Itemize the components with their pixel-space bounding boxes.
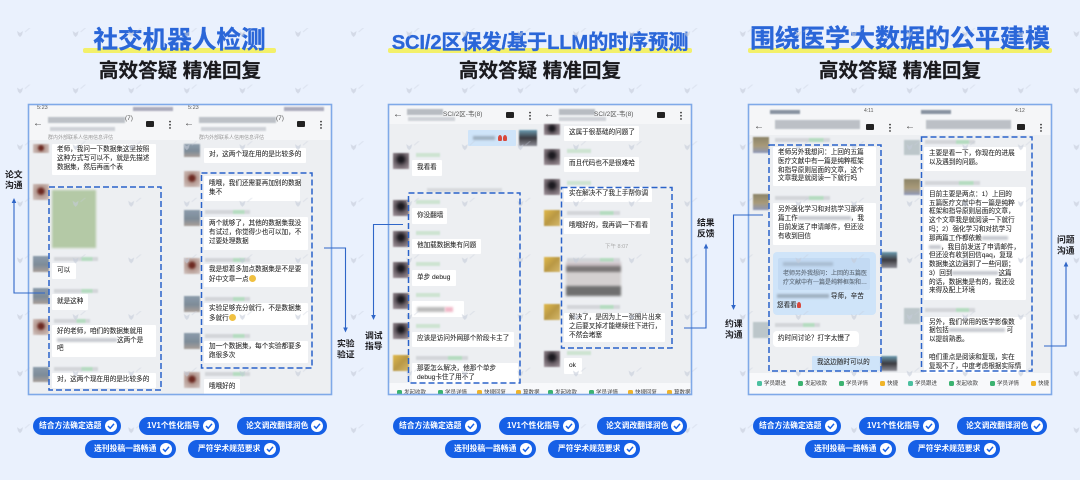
- arrow: question communication: [1044, 234, 1075, 346]
- panel: chat screenshots 3: 主要是看一下，你现在的进展: [929, 150, 1015, 157]
- feature pills: panel 1: 选刊投稿一路畅通: [94, 444, 156, 453]
- subtitle: panel 1: 高效答疑 精准回复: [99, 60, 261, 82]
- panel: chat screenshots 1: 哦哦，我们还需要再加别的数据: [209, 180, 301, 187]
- panel: chat screenshots 1: 群内外部联系人信用信息评估: [199, 135, 264, 141]
- panel: chat screenshots 3: 老师另外我想问：上回的五篇: [778, 149, 864, 156]
- panel: chat screenshots 3: 的话，数据集是有的，我还没: [929, 279, 1015, 286]
- panel: chat screenshots 2: 我看看: [417, 164, 437, 171]
- panel: chat screenshots 3: 医疗文献中有一篇是纯粹框架: [778, 158, 864, 165]
- panel: chat screenshots 1: (7): [125, 115, 133, 122]
- bottom action bar: 学员详情: [997, 381, 1019, 387]
- panel: chat screenshots 3: 和指导原则层面的文章，这个: [778, 166, 864, 174]
- arrow: scheduling communication: 约课: [725, 318, 743, 328]
- panel: chat screenshots 1: 5:23: [37, 105, 48, 111]
- panel: chat screenshots 2: ←: [544, 109, 554, 120]
- panel: chat screenshots 3: 目前主要是两点：1）上回的: [929, 191, 1012, 198]
- panel: chat screenshots 1: 两个就够了，其他的数据集我没: [209, 220, 301, 227]
- feature pills: panel 1: 严符学术规范要求: [198, 444, 260, 453]
- subtitle: panel 2: 高效答疑 精准回复: [459, 60, 621, 82]
- panel: chat screenshots 3: 以及遇到的问题。: [929, 159, 982, 166]
- panel: chat screenshots 2: 单步 debug: [417, 274, 450, 281]
- panel: chat screenshots 2: 那要怎么解决，他那个单步: [417, 365, 496, 372]
- panel: chat screenshots 3: 复现不了，中度考虑根据实际情: [929, 363, 1021, 370]
- panel: chat screenshots 1: 跑很多次: [209, 352, 235, 359]
- panel: chat screenshots 1: (7): [276, 115, 284, 122]
- panel: chat screenshots 2: 之后要叉掉才能继续往下进行，: [569, 323, 661, 330]
- panel: chat screenshots 2: SCI/2区-韦(8): [594, 111, 633, 118]
- panel: chat screenshots 1: 哦哦好的: [209, 383, 235, 390]
- feature pills: panel 3: 结合方法确定选题: [759, 421, 821, 430]
- arrow: experiment validation: [324, 248, 355, 360]
- panel: chat screenshots 3: ←: [754, 121, 764, 132]
- panel: chat screenshots 1: 可以: [57, 267, 70, 274]
- panel: chat screenshots 1: 集不: [209, 188, 222, 196]
- panel: chat screenshots 3: 3）回到 这篇: [929, 270, 1012, 277]
- panel: chat screenshots 3: 4:12: [1015, 108, 1025, 114]
- panel: chat screenshots 1: 这两个是: [117, 337, 143, 344]
- chat bubble: 老师，我问一下数据集这里按照: [57, 146, 149, 153]
- title: social bot detection: 社交机器人检测: [93, 27, 266, 54]
- panel: chat screenshots 1: 5:23: [188, 105, 199, 111]
- arrow: experiment validation: 验证: [337, 348, 355, 360]
- arrow: scheduling communication: 沟通: [725, 328, 743, 340]
- panel: chat screenshots 2: 解决了，是因为上一张图片出来: [569, 314, 661, 321]
- bottom action bar: 快捷: [887, 381, 898, 387]
- feature pills: panel 2: 选刊投稿一路畅通: [454, 444, 516, 453]
- panel: chat screenshots 1: [28, 104, 332, 395]
- panel: chat screenshots 2: 而且代码也不是很难哈: [569, 160, 635, 167]
- panel: chat screenshots 3: 另外强化学习和对抗学习那两: [778, 206, 864, 213]
- arrow: result feedback: [684, 216, 715, 328]
- panel: chat screenshots 1: 吧: [57, 345, 64, 352]
- blurred screenshot image: [566, 262, 621, 296]
- panel: chat screenshots 3: 来得及配上环境: [929, 287, 975, 294]
- panel: chat screenshots 3: 另外，我们常用的医学影像数: [929, 319, 1015, 326]
- chat bubble: 这种方式写可以不，就是先描述: [57, 155, 149, 162]
- feature pills: panel 2: 结合方法确定选题: [399, 421, 461, 430]
- panel: chat screenshots 1: 对，这两个现在用的是比较多的: [57, 376, 149, 383]
- subtitle: panel 3: 高效答疑 精准回复: [819, 60, 981, 82]
- arrow: debug guidance: 调试: [365, 330, 383, 340]
- panel: chat screenshots 1: 加一个数据集，每个实验都要多: [209, 343, 301, 350]
- feature pills: panel 2: 1V1个性化指导: [507, 421, 560, 430]
- chat bubble: [52, 144, 156, 175]
- panel: chat screenshots 1: 实验足够充分就行，不是数据集: [209, 305, 301, 312]
- feature pills: panel 1: 论文调改翻译润色: [246, 421, 308, 430]
- bottom action bar: [388, 383, 692, 395]
- blue reply bubble with quote: [773, 252, 876, 315]
- bottom action bar: 学员跟进: [915, 381, 937, 387]
- panel: chat screenshots 1: 有试过，你觉得少也可以加，不: [209, 229, 301, 236]
- panel: chat screenshots 2: 他加载数据集有问题: [417, 242, 476, 249]
- bottom action bar: 学员详情: [846, 381, 868, 387]
- arrow: question communication: 沟通: [1057, 244, 1075, 256]
- panel: chat screenshots 2: ok: [569, 362, 576, 369]
- panel: chat screenshots 1: 我是想着多加点数据集是不是要: [209, 266, 301, 273]
- panel: chat screenshots 1: ←: [33, 118, 43, 129]
- bottom action bar: 学员跟进: [764, 381, 786, 387]
- arrow: result feedback: 反馈: [697, 228, 715, 238]
- panel: chat screenshots 3: 五篇医疗文献中有一篇是纯粹: [929, 200, 1015, 207]
- panel: chat screenshots 3: 那两篇工作都依赖: [929, 235, 982, 242]
- panel: chat screenshots 1: ←: [184, 118, 194, 129]
- bottom action bar: 快捷: [1038, 381, 1049, 387]
- feature pills: panel 3: 严符学术规范要求: [918, 444, 980, 453]
- panel: chat screenshots 2: 哦哦好的，我再调一下看看: [569, 222, 648, 229]
- blue reply bubble with quote: 老师另外我想问：上回的五篇医: [783, 271, 867, 277]
- arrow: paper communication: 沟通: [5, 179, 23, 190]
- title: SCI time-series forecasting: SCI/2区保发/基于LLM的时序预测: [392, 32, 688, 54]
- feature pills: panel 3: 选刊投稿一路畅通: [814, 444, 876, 453]
- panel: chat screenshots 3: 这个文章我是就阅读一下就行: [929, 217, 1015, 224]
- feature pills: panel 2: 论文调改翻译润色: [606, 421, 668, 430]
- panel: chat screenshots 2: 下午 8:07: [605, 244, 628, 250]
- panel: chat screenshots 1: 过要处理数据: [209, 238, 249, 245]
- panel: chat screenshots 3: 有收到回信: [778, 233, 811, 240]
- panel: chat screenshots 3: 文章我是就阅读一下就行吗: [778, 175, 857, 182]
- panel: chat screenshots 3: [748, 104, 1052, 395]
- panel: chat screenshots 3: ←: [905, 121, 915, 132]
- arrow: debug guidance: [365, 224, 403, 351]
- arrow: paper communication: [5, 168, 45, 293]
- panel: chat screenshots 1: 就是这种: [57, 298, 83, 305]
- panel: chat screenshots 3: 约时间讨论？打字太慢了: [778, 335, 851, 342]
- arrow: result feedback: 结果: [697, 216, 715, 228]
- panel: chat screenshots 2: [388, 104, 692, 395]
- arrow: debug guidance: 指导: [365, 340, 383, 351]
- panel: chat screenshots 3: ，我目前发送了申请邮件，: [941, 244, 1020, 250]
- arrow: experiment validation: 实验: [337, 338, 355, 348]
- panel: chat screenshots 2: 应该是访问外网那个阶段卡主了: [417, 335, 509, 342]
- bottom action bar: 发起收款: [956, 381, 978, 387]
- feature pills: panel 1: [33, 417, 327, 458]
- feature pills: panel 2: 严符学术规范要求: [558, 444, 620, 453]
- panel: chat screenshots 2: SCI/2区-韦(8): [443, 111, 482, 118]
- panel: chat screenshots 3: 框架和指导原则层面的文章，: [929, 208, 1015, 215]
- feature pills: panel 3: 1V1个性化指导: [867, 421, 920, 430]
- panel: chat screenshots 2: ←: [393, 109, 403, 120]
- panel: chat screenshots 3: 目前发送了申请邮件，但还没: [778, 224, 864, 231]
- panel: chat screenshots 1: 好中文章一点: [209, 276, 249, 283]
- panel: chat screenshots 2: 不然会堵塞: [569, 332, 602, 339]
- panel: chat screenshots 3: 篇工作 ，我: [778, 215, 864, 222]
- panel: chat screenshots 1: 群内外部联系人信用信息评估: [48, 135, 113, 141]
- title: fair modeling on medical big data: 围绕医学大数据的公平建模: [750, 25, 1050, 53]
- feature pills: panel 1: 1V1个性化指导: [147, 421, 200, 430]
- feature pills: panel 3: 论文调改翻译润色: [966, 421, 1028, 430]
- panel: chat screenshots 1: 多就行: [209, 314, 229, 322]
- arrow: scheduling communication: [725, 215, 763, 340]
- chat bubble: 数据集，然后再画个表: [57, 164, 123, 171]
- panel: chat screenshots 3: 4:11: [864, 108, 873, 114]
- panel: chat screenshots 2: 这属于很基础的问题了: [569, 129, 635, 136]
- panel: chat screenshots 3: 我这边随时可以的: [817, 359, 870, 366]
- panel: chat screenshots 2: 实在解决不了我上手帮你调: [569, 190, 648, 197]
- blurred shared image: [52, 190, 96, 248]
- blue reply bubble with quote: 您看看: [777, 302, 797, 309]
- panel: chat screenshots 1: 好的老师，咱们的数据集就用: [57, 328, 143, 335]
- panel: chat screenshots 2: 你没翻墙: [417, 212, 443, 219]
- feature pills: panel 3: [753, 417, 1047, 458]
- blue reply bubble with quote: 导师，辛苦: [831, 293, 864, 300]
- feature pills: panel 2: [393, 417, 687, 458]
- panel: chat screenshots 3: 吗；2）强化学习和对抗学习: [929, 226, 1012, 233]
- blue reply bubble with quote: 疗文献中有一篇是纯粹框架和…: [783, 280, 867, 286]
- arrow: question communication: 问题: [1057, 234, 1075, 244]
- feature pills: panel 1: 结合方法确定选题: [39, 421, 101, 430]
- bottom action bar: [748, 373, 1052, 395]
- panel: chat screenshots 3: 以提前熟悉。: [929, 336, 969, 343]
- arrow: paper communication: 论文: [5, 168, 23, 180]
- panel: chat screenshots 1: 对，这两个现在用的是比较多的: [209, 151, 301, 158]
- panel: chat screenshots 3: 但还没有收到回信qaq，复现: [929, 252, 1013, 259]
- panel: chat screenshots 2: debug卡住了用不了: [417, 374, 475, 380]
- panel: chat screenshots 3: 据包括 可: [929, 327, 1013, 334]
- panel: chat screenshots 3: 数据集这边遇到了一些问题；: [929, 261, 1015, 268]
- bottom action bar: 发起收款: [805, 381, 827, 387]
- panel: chat screenshots 3: 咱们重点是阅读和复现，实在: [929, 354, 1015, 361]
